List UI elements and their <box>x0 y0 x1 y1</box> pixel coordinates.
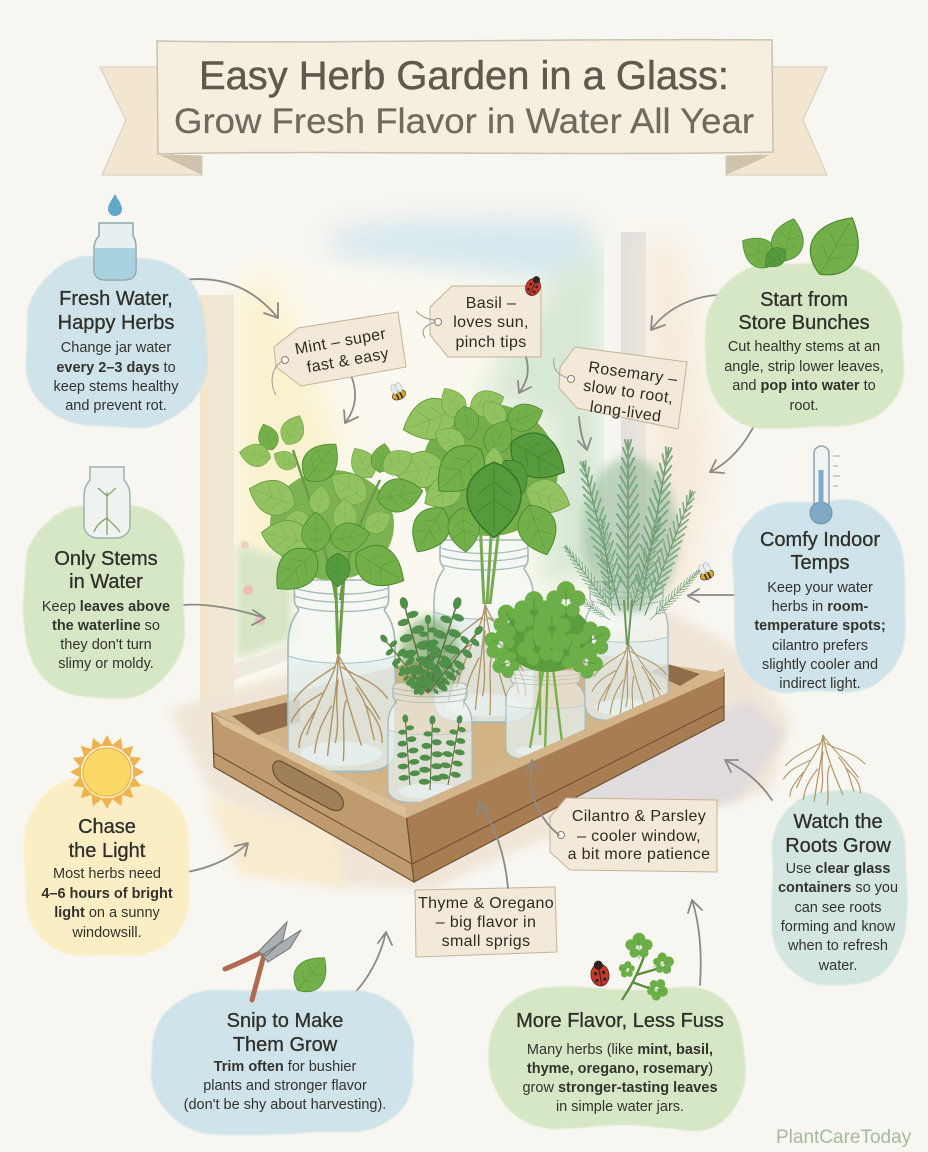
text: only stems: slimy or moldy. <box>58 656 154 672</box>
text: fresh water: and prevent rot. <box>65 398 167 414</box>
text: watch the roots: Roots Grow <box>785 835 891 857</box>
icon: pruning shears <box>225 922 336 1000</box>
text: only stems: they don't turn <box>60 637 152 653</box>
text: more flavor: grow stronger-tasting leaves <box>522 1080 718 1096</box>
title text: Easy Herb Garden in a Glass: <box>199 54 729 98</box>
thyme plant and jar <box>372 593 492 803</box>
text: start from store <box>724 289 884 414</box>
tag: rosemary: Rosemary – <box>587 359 679 389</box>
text: fresh water: Change jar water <box>61 340 171 356</box>
bees <box>388 381 715 582</box>
text: comfy temps: slightly cooler and <box>762 657 878 673</box>
title banner: Grow Fresh Flavor in Water All Year <box>174 102 754 141</box>
text: only stems: in Water <box>69 571 143 593</box>
mint plant and jar <box>238 411 426 772</box>
tag: thyme and oregano <box>415 887 557 957</box>
icon: jar with water drop <box>94 194 136 280</box>
text: comfy temps: Temps <box>791 552 849 574</box>
panel: comfy indoor temps <box>732 446 904 694</box>
tag: cilantro and parsley: a bit more patience <box>568 846 710 863</box>
text: comfy temps: cilantro prefers <box>772 638 868 654</box>
tag: thyme and oregano: small sprigs <box>442 933 530 950</box>
text: fresh water: Fresh Water, <box>59 288 173 310</box>
text: start from store: and pop into water to <box>732 378 876 394</box>
panel: chase the light <box>26 735 188 958</box>
text: comfy temps: temperature spots; <box>754 618 886 634</box>
text: start from store: Store Bunches <box>738 312 870 334</box>
icon: leaf <box>286 948 336 1000</box>
panel: more flavor less fuss <box>492 933 746 1128</box>
text: start from store: root. <box>789 398 819 414</box>
text: snip: Them Grow <box>233 1034 338 1056</box>
central window scene <box>170 218 790 890</box>
text: watch the roots: containers so you <box>778 880 898 896</box>
tag: cilantro and parsley: Cilantro & Parsley <box>572 808 706 825</box>
text: snip <box>184 1010 386 1113</box>
text: watch the roots <box>778 811 898 974</box>
wooden tray back <box>212 640 724 813</box>
tag: thyme and oregano: – big flavor in <box>436 914 536 931</box>
icon: ladybug on basil tag <box>523 273 544 298</box>
text: snip: plants and stronger flavor <box>203 1078 367 1094</box>
watermark: PlantCareToday <box>776 1127 912 1148</box>
text: comfy temps <box>754 529 886 692</box>
tag: rosemary: long-lived <box>589 399 662 426</box>
parsley plant and jar <box>477 581 618 759</box>
text: only stems: Keep leaves above <box>42 599 170 615</box>
tag: mint: fast & easy <box>306 345 390 377</box>
text: start from store: angle, strip lower leaves, <box>724 359 884 375</box>
icon: herb leaves <box>734 206 872 286</box>
text: chase the light: Most herbs need <box>53 866 161 882</box>
text: more flavor: Many herbs (like mint, basil, <box>527 1042 713 1058</box>
text: start from store: Start from <box>760 289 848 311</box>
text: comfy temps: herbs in room- <box>772 599 869 615</box>
text: more flavor <box>516 1010 724 1115</box>
icon: parsley sprig <box>616 933 677 1004</box>
text: watch the roots: Use clear glass <box>786 861 890 877</box>
text: chase the light: windowsill. <box>71 925 142 941</box>
panel: snip to make them grow <box>152 922 415 1132</box>
arrows <box>180 279 772 998</box>
icon: thermometer <box>810 446 840 524</box>
icon: ladybug <box>589 959 611 987</box>
text: watch the roots: water. <box>818 958 857 974</box>
text: comfy temps: Keep your water <box>767 580 873 596</box>
tag: rosemary <box>554 347 687 429</box>
text: only stems: Only Stems <box>54 548 158 570</box>
text: only stems: the waterline so <box>52 618 160 634</box>
tag: basil: Basil – <box>466 295 516 312</box>
icon: roots <box>783 735 865 805</box>
tag: mint <box>272 312 406 395</box>
text: watch the roots: Watch the <box>793 811 883 833</box>
title banner <box>100 40 827 175</box>
panel: fresh water <box>26 194 204 427</box>
text: chase the light: 4–6 hours of bright <box>41 886 173 902</box>
text: fresh water: every 2–3 days to <box>56 360 176 376</box>
basil plant and jar <box>392 382 575 722</box>
text: start from store: Cut healthy stems at an <box>728 339 880 355</box>
tag: basil: pinch tips <box>455 334 527 351</box>
text: snip: Snip to Make <box>227 1010 343 1032</box>
text: more flavor: in simple water jars. <box>556 1099 684 1115</box>
wooden tray front <box>212 668 724 882</box>
text: chase the light <box>41 816 173 941</box>
panel: watch the roots grow <box>772 735 906 984</box>
tag: thyme and oregano: Thyme & Oregano <box>418 895 554 912</box>
text: chase the light: the Light <box>69 840 146 862</box>
text: comfy temps: indirect light. <box>779 676 861 692</box>
tag: cilantro and parsley: – cooler window, <box>577 828 701 845</box>
tag: rosemary: slow to root, <box>582 378 675 407</box>
icon: jar with sprig <box>84 467 130 538</box>
text: fresh water: keep stems healthy <box>54 379 179 395</box>
icon: sun <box>70 735 144 809</box>
text: more flavor: thyme, oregano, rosemary) <box>527 1061 713 1077</box>
tag: basil <box>416 273 544 357</box>
tag: basil: loves sun, <box>453 314 529 331</box>
text: only stems <box>42 548 170 672</box>
panel: start from store bunches <box>705 206 901 429</box>
rosemary plant and jar <box>561 440 704 721</box>
text: fresh water: Happy Herbs <box>58 312 174 334</box>
text: comfy temps: Comfy Indoor <box>760 529 880 551</box>
text: watch the roots: when to refresh <box>787 938 888 954</box>
text: watch the roots: can see roots <box>794 900 882 916</box>
text: snip: (don't be shy about harvesting). <box>184 1097 386 1113</box>
text: chase the light: light on a sunny <box>54 905 161 921</box>
tag: mint: Mint – super <box>294 326 388 358</box>
tag: cilantro and parsley <box>550 798 717 872</box>
text: chase the light: Chase <box>78 816 136 838</box>
text: more flavor: More Flavor, Less Fuss <box>516 1010 724 1032</box>
text: snip: Trim often for bushier <box>214 1059 356 1075</box>
text: watch the roots: forming and know <box>781 919 896 935</box>
text: fresh water <box>54 288 179 414</box>
panel: only stems in water <box>26 467 186 697</box>
